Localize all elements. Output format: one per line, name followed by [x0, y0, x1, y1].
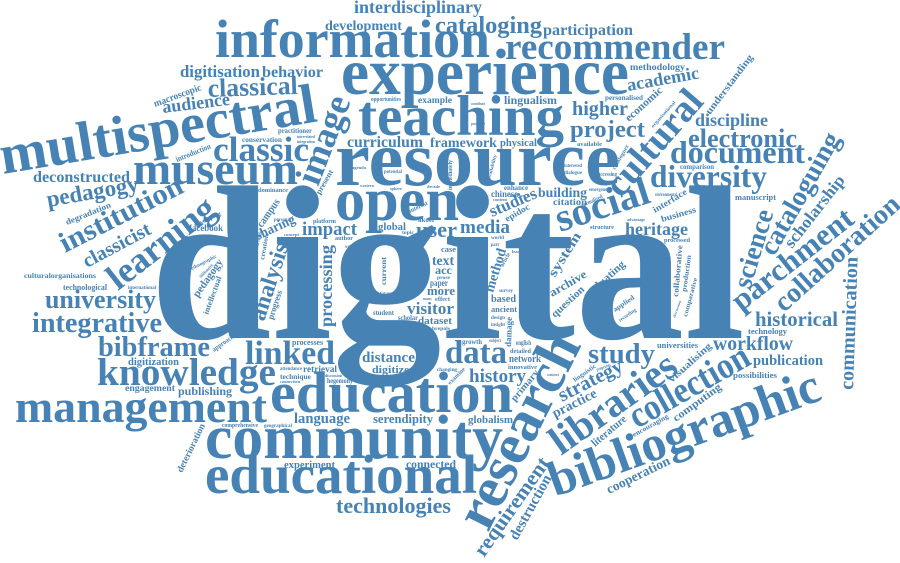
small words: processes	[292, 338, 323, 347]
medium words: bibframe	[98, 332, 210, 363]
small words: akoer	[418, 216, 435, 224]
small words: ethnographic	[191, 254, 219, 272]
large words: information	[215, 9, 490, 69]
small words: author	[335, 236, 353, 242]
small words: technique	[280, 372, 312, 381]
small words: citation	[553, 198, 588, 208]
small words: connection	[280, 379, 301, 384]
medium words: processing	[316, 245, 336, 327]
small words: examine	[447, 366, 467, 386]
small words: conservation	[242, 135, 283, 144]
large words: institution	[54, 169, 188, 259]
large words: teaching	[358, 85, 564, 148]
small words: introduction	[174, 141, 212, 164]
medium words: development	[325, 19, 402, 34]
small words: scholar	[398, 314, 418, 322]
small words: potential	[384, 170, 403, 175]
small words: production	[680, 254, 693, 292]
medium words: integrative	[32, 308, 162, 339]
medium words: cataloging	[435, 13, 542, 39]
medium words: deconstructed	[33, 169, 130, 186]
small words: epidoc	[503, 202, 531, 224]
small words: literature	[589, 413, 629, 449]
medium words: university	[45, 285, 156, 314]
small words: integration	[297, 139, 315, 144]
medium words: evaluating	[581, 258, 628, 302]
small words: sphere	[390, 186, 402, 191]
medium words: globalism	[468, 414, 513, 426]
medium words: classicist	[79, 218, 155, 272]
small words: linguistic	[572, 363, 598, 384]
small words: network	[509, 354, 541, 365]
medium words: dataset	[418, 316, 453, 327]
small words: topic	[402, 231, 415, 236]
small words: methodology	[630, 63, 685, 73]
medium words: user	[416, 217, 457, 242]
medium words: question	[550, 284, 587, 320]
small words: contribute	[471, 101, 485, 106]
small words: procedure	[471, 121, 485, 126]
small words: advantage	[627, 217, 645, 222]
medium words: acc	[435, 263, 453, 277]
medium words: publishing	[178, 384, 232, 398]
small words: personal	[274, 218, 292, 223]
small words: interrelated	[297, 134, 315, 139]
small words: applied	[612, 294, 636, 314]
medium words: media	[460, 217, 511, 238]
small words: discussion	[672, 300, 682, 318]
small words: interested	[564, 164, 582, 169]
medium words: pedagogy	[191, 256, 226, 300]
medium words: engagement	[125, 383, 176, 394]
medium words: serendipity	[373, 412, 434, 426]
medium words: history	[469, 366, 526, 387]
large words: data	[445, 335, 507, 371]
large words: management	[15, 381, 268, 432]
small words: technological	[63, 283, 108, 292]
small words: effort	[395, 298, 405, 303]
medium words: behavior	[262, 64, 323, 81]
large words: experience	[341, 36, 629, 109]
medium words: academic	[625, 63, 701, 95]
medium words: audience	[161, 89, 231, 117]
small words: formalized	[581, 194, 604, 209]
small words: environmental	[655, 193, 677, 198]
small words: collaborative	[671, 244, 685, 297]
small words: growth	[462, 337, 483, 346]
small words: economic	[623, 84, 665, 124]
small words: dialogue	[564, 171, 583, 176]
small words: many	[423, 296, 433, 301]
large words: learning	[98, 188, 223, 297]
medium words: technologies	[336, 493, 451, 518]
large words: social	[549, 168, 655, 241]
word: digital: digital	[150, 142, 745, 387]
large words: bibliographic	[540, 357, 828, 507]
medium words: system	[546, 229, 585, 280]
small words: design	[491, 316, 505, 321]
small words: technology	[748, 327, 787, 336]
medium words: text	[432, 254, 454, 269]
medium words: more	[427, 283, 455, 298]
medium words: publication	[753, 353, 823, 369]
medium words: framework	[430, 136, 497, 151]
small words: western	[360, 183, 374, 188]
medium words: participation	[543, 22, 633, 39]
small words: emergence	[589, 188, 610, 193]
small words: innovative	[508, 365, 537, 371]
medium words: distance	[362, 350, 415, 366]
small words: available	[577, 142, 602, 148]
small words: intellectual	[201, 274, 224, 316]
medium words: discipline	[695, 110, 768, 130]
small words: brepols	[432, 326, 450, 332]
small words: increase	[510, 193, 524, 198]
large words: education	[270, 360, 513, 425]
small words: business	[660, 204, 698, 224]
small words: future	[380, 292, 393, 297]
medium words: visitor	[407, 299, 454, 318]
medium words: archive	[546, 267, 590, 300]
small words: processed	[664, 238, 691, 244]
small words: writing	[345, 245, 357, 250]
small words: cataloguer	[612, 143, 631, 171]
small words: creation	[259, 233, 271, 260]
small words: detailed	[510, 349, 532, 355]
small words: retrieval	[303, 364, 338, 374]
small words: student	[373, 309, 395, 317]
large words: recommender	[505, 27, 725, 68]
small words: personalised	[605, 93, 644, 102]
small words: damage	[503, 317, 514, 347]
large words: educational	[205, 444, 477, 505]
medium words: electronic	[688, 124, 797, 153]
small words: degradation	[64, 199, 113, 227]
medium words: curriculum	[347, 134, 423, 151]
large words: cataloguing	[752, 126, 846, 260]
small words: lead	[512, 249, 520, 254]
medium words: strategy	[554, 355, 627, 406]
medium words: analysis	[245, 240, 294, 324]
small words: discussion	[325, 373, 343, 378]
small words: possibilities	[733, 371, 777, 380]
small words: positive	[345, 265, 360, 270]
small words: paper	[430, 278, 448, 288]
small words: survey	[499, 289, 513, 294]
small words: ancient	[491, 305, 517, 314]
small words: bibliometric	[198, 262, 214, 279]
small words: approaches	[211, 330, 240, 354]
small words: immediately	[448, 160, 454, 190]
large words: resource	[335, 115, 620, 202]
large words: libraries	[540, 342, 685, 463]
small words: example	[418, 95, 452, 105]
large words: cultural	[596, 81, 712, 205]
medium words: studies	[486, 184, 540, 221]
large words: open	[335, 167, 459, 234]
small words: prose	[437, 276, 451, 281]
small words: chinese	[491, 189, 518, 199]
medium words: language	[294, 411, 351, 427]
small words	[24, 53, 787, 474]
small words: comprehensive	[222, 423, 258, 429]
medium words: historical	[755, 307, 838, 331]
small words: visualising	[667, 341, 714, 385]
small words: culturalorganisations	[24, 271, 96, 280]
small words: encouraging	[631, 412, 670, 439]
medium words: scholarship	[780, 171, 849, 251]
large words: collection	[621, 335, 758, 437]
small words: world	[491, 235, 504, 241]
medium words: pedagogy	[45, 171, 141, 212]
small words: dominance	[258, 188, 288, 194]
small words: primary	[509, 368, 542, 404]
large words: classic	[213, 130, 309, 169]
large words: document	[670, 134, 805, 170]
medium words: workflow	[713, 333, 794, 355]
medium words: impact	[302, 219, 358, 240]
medium words: digitization	[128, 357, 179, 368]
small words: edition	[404, 254, 414, 290]
small words: structure	[590, 225, 614, 231]
medium words: project	[570, 116, 646, 143]
small words: organisational	[651, 100, 678, 129]
medium words: lingualism	[504, 93, 557, 107]
small words: changing	[437, 368, 458, 373]
small words: manuscript	[735, 192, 776, 202]
small words: construct	[547, 372, 559, 377]
medium words: study	[588, 338, 655, 370]
large words: science	[727, 206, 779, 292]
medium words: heritage	[625, 219, 688, 239]
small words: deterioration	[176, 422, 208, 474]
large words: image	[288, 90, 359, 190]
small words: platform	[313, 219, 336, 225]
medium words: requirement	[468, 452, 555, 561]
small words: global	[378, 221, 406, 233]
small words: facebook	[189, 223, 223, 233]
small words: present	[314, 168, 335, 196]
small words: surveying	[255, 229, 265, 249]
small words: interest	[408, 200, 430, 215]
small words: universities	[657, 341, 698, 350]
medium words: sharing	[253, 212, 298, 244]
small words: comparison	[680, 163, 714, 171]
large words: parchment	[724, 200, 861, 318]
small words: part	[491, 243, 499, 248]
medium words: cooperation	[604, 453, 673, 497]
small words: english	[516, 339, 531, 347]
large words: multispectral	[0, 73, 321, 187]
small words: comparative	[682, 277, 699, 318]
small words: article	[500, 252, 512, 268]
medium words: destruction	[507, 472, 556, 543]
small words: many	[345, 255, 357, 260]
small words: current	[380, 256, 388, 285]
medium words: higher	[572, 98, 628, 120]
small words: international	[128, 286, 157, 291]
small words: developing	[193, 211, 222, 229]
medium words: campus	[255, 196, 283, 230]
medium words: practice	[550, 386, 600, 422]
small words: opportunities	[371, 97, 402, 103]
small words: agenda	[352, 165, 367, 170]
small words: geographical	[264, 424, 293, 429]
small words: insight	[491, 323, 505, 328]
small words: concept	[284, 232, 300, 237]
small words: accessing	[598, 172, 617, 178]
small words: subject	[489, 339, 501, 344]
medium words: building	[538, 185, 587, 200]
small words: decade	[427, 184, 440, 189]
small words: understanding	[704, 53, 756, 117]
medium words: method	[482, 247, 510, 294]
large words: museum	[133, 144, 298, 194]
medium words: classical	[207, 71, 298, 103]
small words: interface	[651, 187, 689, 215]
small words: properties	[596, 362, 612, 372]
small words: hegemony	[327, 377, 353, 385]
small words: content	[493, 197, 507, 202]
small words: computing	[671, 381, 724, 424]
small words: attendance	[280, 367, 303, 372]
medium words: experiment	[284, 460, 336, 471]
large words: linked	[245, 335, 335, 372]
medium words: digitized	[372, 364, 416, 376]
small words: progress	[265, 289, 284, 321]
small words: effect	[435, 297, 450, 303]
medium words: based	[491, 294, 516, 305]
large words: community	[205, 404, 503, 472]
medium words: connected	[406, 458, 456, 471]
large words: knowledge	[97, 351, 276, 394]
small words: case	[441, 245, 456, 254]
small words: recording	[618, 307, 638, 324]
large words: research	[441, 322, 593, 539]
small words: availability	[487, 154, 499, 181]
small words: macroscopic	[152, 82, 204, 110]
medium words: physical	[500, 138, 537, 149]
small words: enhance	[504, 184, 528, 192]
large words: diversity	[650, 159, 767, 194]
medium words: communication	[836, 256, 863, 390]
small words: practitioner	[278, 127, 312, 135]
medium words: digitisation	[180, 62, 260, 81]
